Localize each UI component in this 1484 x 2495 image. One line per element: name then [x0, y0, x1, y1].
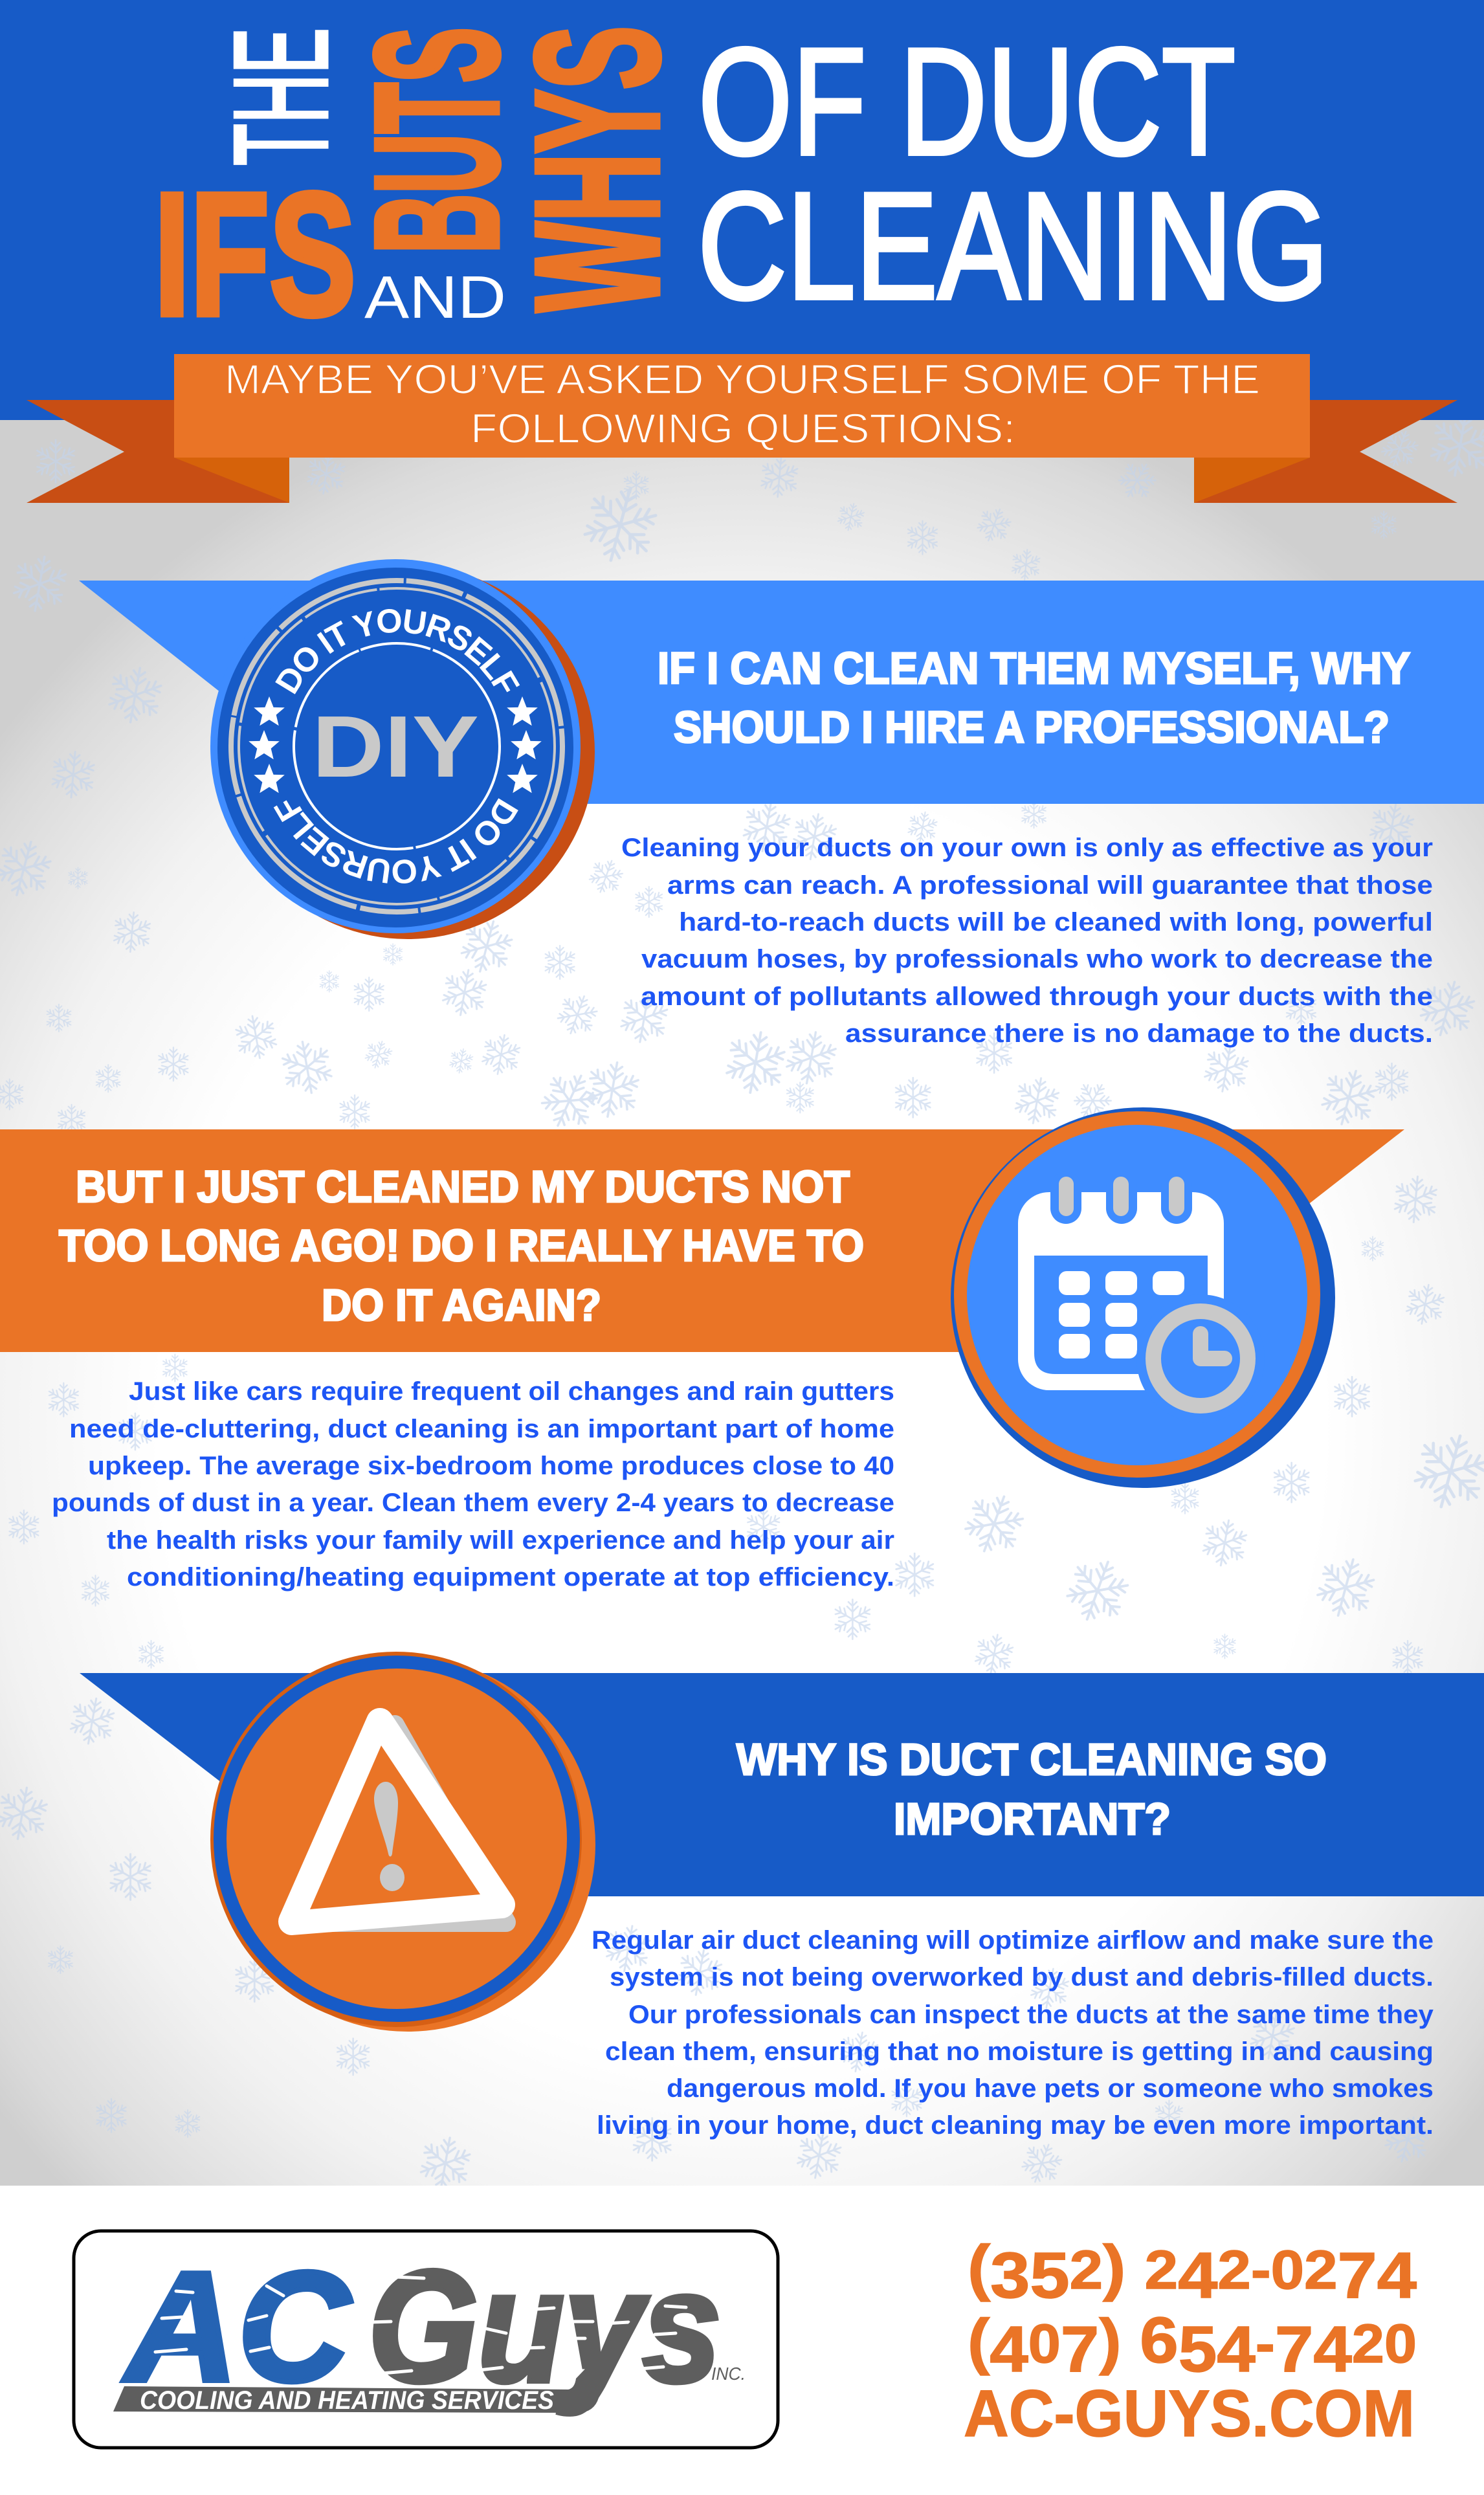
panel: snowflake background: [0, 410, 1484, 2193]
badge dark rim: [210, 1652, 582, 2027]
phone number 1: 2-02: [1217, 2239, 1338, 2300]
stamp rim: [210, 559, 581, 933]
badge orange ring: [954, 1111, 1320, 1478]
ribbon left fold: [174, 458, 289, 503]
text block: answer 2: Just like cars require frequent oil changes and rain gutters: [129, 1377, 894, 1406]
ribbon right tail: [1194, 400, 1457, 503]
heading: main title: [154, 16, 1329, 352]
stamp inner white ring: [294, 643, 500, 849]
stamp bottom text: DO IT YOURSELF: [273, 798, 518, 883]
ribbon right fold: [1194, 458, 1310, 503]
icon: calendar badge: [951, 1107, 1335, 1488]
band: dark blue: [80, 1673, 1484, 1896]
logo tagline: COOLING AND HEATING SERVICES: [140, 2386, 554, 2415]
text block: answer 3: dangerous mold. If you have pets or someone who smokes: [667, 2074, 1434, 2103]
title words: OF DUCT: OF DUCT: [698, 16, 1235, 186]
phone number 1: 74: [1338, 2239, 1417, 2312]
text block: answer 2: upkeep. The average six-bedroom home produces close to 40: [88, 1452, 894, 1480]
logo frost notches: [155, 2277, 686, 2373]
ribbon left tail: [27, 400, 289, 503]
phone number 1: 2: [1070, 2239, 1103, 2300]
heading: question 3: [736, 1735, 1327, 1844]
text block: answer 2: conditioning/heating equipment operate at top efficiency.: [127, 1563, 894, 1591]
ribbon text line 2: FOLLOWING QUESTIONS:: [471, 405, 1015, 452]
stamp second grey ring: [239, 588, 555, 904]
phone number 1: 35: [990, 2239, 1070, 2312]
text block: answer 3: Regular air duct cleaning will optimize airflow and make sure the: [592, 1926, 1434, 1955]
panel: blue header: [0, 0, 1484, 420]
phone number 1: 4: [1178, 2239, 1218, 2312]
ribbon banner: [27, 354, 1457, 503]
phone number 1: ) 2: [1103, 2233, 1175, 2302]
calendar rings: [1059, 1177, 1184, 1216]
icon: DIY stamp: [192, 559, 595, 939]
phone number 1: (: [968, 2233, 990, 2302]
badge shadow: [951, 1107, 1335, 1488]
heading: question 2: DO IT AGAIN?: [322, 1280, 601, 1330]
phone number 2: -: [1256, 2313, 1275, 2374]
calendar grid area: [1034, 1256, 1208, 1374]
text block: answer 3: Our professionals can inspect the ducts at the same time they: [628, 2001, 1434, 2029]
band: orange: [0, 1129, 1404, 1352]
phone number 2: 74: [1275, 2313, 1352, 2386]
ribbon face: [174, 354, 1310, 458]
text block: answer 1: hard-to-reach ducts will be cleaned with long, powerful: [679, 908, 1433, 937]
icon: warning badge: [210, 1652, 595, 2032]
phone number 2: 7: [1061, 2313, 1099, 2386]
badge shadow: [220, 1658, 595, 2032]
phone number 2: 20: [1352, 2313, 1417, 2374]
logo word: AC: AC: [123, 2240, 351, 2414]
warning triangle inner: [310, 1746, 480, 1909]
panel: question 2: [0, 1107, 1404, 1591]
text block: answer 3: clean them, ensuring that no moisture is getting in and causing: [605, 2037, 1434, 2066]
text block: answer 3: system is not being overworked by dust and debris-filled ducts.: [610, 1963, 1434, 1991]
stamp outer grey ring: [231, 581, 562, 912]
heading: question 2: [59, 1162, 864, 1330]
text block: answer 1: vacuum hoses, by professionals who work to decrease the: [641, 945, 1433, 973]
text block: answer 1: Cleaning your ducts on your own is only as effective as your: [621, 834, 1433, 862]
stamp shadow: [221, 565, 595, 939]
text block: answer 1: [621, 834, 1433, 1048]
calendar body: [1018, 1192, 1224, 1390]
text block: answer 2: pounds of dust in a year. Clean them every 2-4 years to decrease: [52, 1489, 894, 1517]
logo bar: [113, 2299, 651, 2413]
text block: answer 2: need de-cluttering, duct cleaning is an important part of home: [69, 1415, 894, 1443]
stamp top text: DO IT YOURSELF: [275, 609, 520, 694]
panel: contact details: [964, 2233, 1417, 2450]
heading: question 3: IMPORTANT?: [894, 1794, 1171, 1844]
heading: question 2: BUT I JUST CLEANED MY DUCTS NOT: [76, 1162, 850, 1212]
band: light blue: [79, 581, 1484, 804]
text block: answer 1: amount of pollutants allowed through your ducts with the: [641, 982, 1433, 1011]
phone number 2: (: [968, 2307, 990, 2376]
text block: answer 1: assurance there is no damage to the ducts.: [845, 1019, 1433, 1048]
warning triangle shadow: [324, 1725, 506, 1922]
phone number 2: ): [1099, 2307, 1140, 2376]
clock hands: [1201, 1334, 1224, 1358]
logo frame: [74, 2231, 778, 2448]
text block: answer 2: the health risks your family will experience and help your air: [107, 1526, 894, 1555]
heading: question 2: TOO LONG AGO! DO I REALLY HAVE TO: [59, 1221, 864, 1270]
calendar day squares: [1059, 1271, 1184, 1358]
stamp stars: [249, 696, 542, 793]
text block: answer 2: [52, 1377, 894, 1591]
warning triangle white: [292, 1722, 502, 1922]
panel: question 3: [80, 1652, 1484, 2140]
heading: question 1: IF I CAN CLEAN THEM MYSELF, WHY: [658, 643, 1410, 693]
badge blue ring: [214, 1656, 580, 2022]
text block: answer 3: living in your home, duct cleaning may be even more important.: [597, 2111, 1434, 2140]
clock cutout: [1136, 1294, 1265, 1423]
heading: question 1: [658, 643, 1410, 752]
phone number 2: 0: [1028, 2313, 1061, 2374]
exclamation mark: [374, 1782, 404, 1891]
calendar ring slots: [1050, 1171, 1192, 1224]
text block: answer 3: [592, 1926, 1434, 2140]
heading: question 1: SHOULD I HIRE A PROFESSIONAL?: [674, 702, 1390, 752]
panel: footer logo box: [74, 2231, 778, 2448]
phone number 2: 54: [1179, 2313, 1256, 2386]
logo word: Guys: Guys: [368, 2237, 721, 2415]
website: AC-GUYS.COM: [964, 2377, 1415, 2450]
badge blue face: [967, 1125, 1307, 1465]
title word: AND: AND: [364, 263, 506, 331]
ribbon text line 1: MAYBE YOU’VE ASKED YOURSELF SOME OF THE: [225, 356, 1260, 403]
phone number 2: 6: [1140, 2304, 1179, 2377]
logo INC: INC.: [711, 2364, 746, 2384]
stamp DIY text: DIY: [312, 698, 479, 795]
panel: question 1: [79, 559, 1484, 1048]
badge orange face: [227, 1669, 567, 2009]
title word: CLEANING: CLEANING: [698, 161, 1329, 331]
clock face: [1153, 1311, 1248, 1406]
phone number 2: 4: [990, 2313, 1028, 2386]
heading: question 3: WHY IS DUCT CLEANING SO: [736, 1735, 1327, 1784]
stamp face: [217, 568, 573, 927]
text block: answer 1: arms can reach. A professional will guarantee that those: [667, 871, 1433, 900]
title word: IFS: IFS: [154, 157, 356, 352]
